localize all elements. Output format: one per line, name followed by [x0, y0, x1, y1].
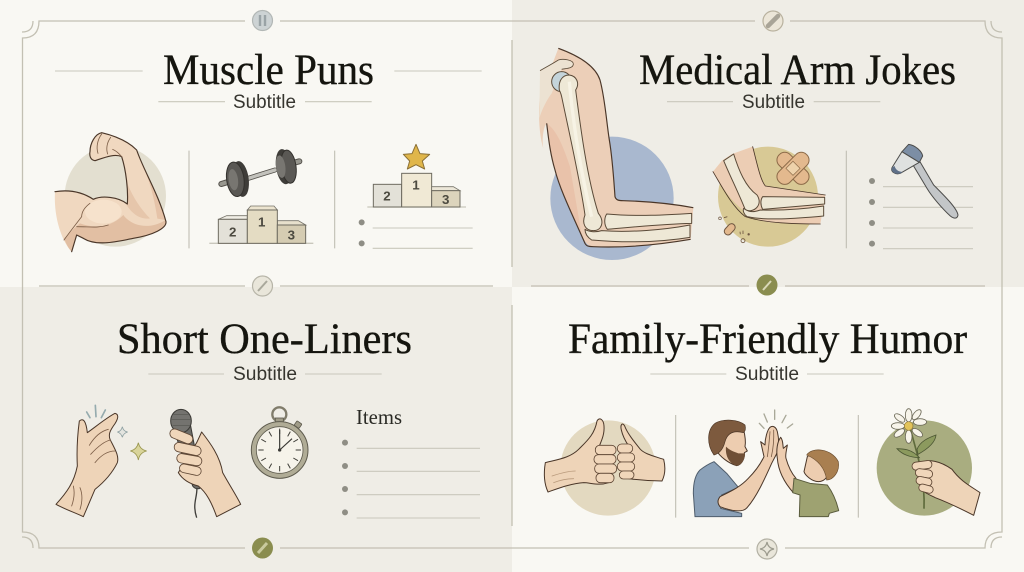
- icon: microphone in hand: [168, 409, 241, 518]
- icon: podium left: [209, 206, 313, 243]
- medallion: middle left: [252, 276, 272, 296]
- icon: flexed arm: [55, 133, 166, 252]
- title: muscle puns: Muscle Puns: [163, 47, 374, 94]
- icon: elbow with bandage: [713, 147, 825, 247]
- icon: podium right with star: 3: [442, 192, 449, 207]
- icon: podium left: 2: [229, 224, 236, 239]
- panel: short one-liners: [56, 316, 480, 518]
- panel artwork: muscle puns: [55, 71, 482, 252]
- panel: medical arm jokes: [539, 47, 973, 260]
- title: short one-liners: Short One-Liners: [117, 316, 412, 363]
- icon: arm anatomy: [539, 48, 693, 260]
- medallion: middle right: [756, 274, 778, 296]
- medallion: top left: [252, 10, 272, 30]
- medallion: bottom right: [757, 539, 777, 559]
- icon: podium left: 3: [288, 228, 295, 243]
- subtitle: medical arm jokes: Subtitle: [742, 92, 805, 113]
- icon: reflex hammer: [892, 144, 958, 218]
- icon: dad and child high five: [693, 410, 839, 517]
- items heading: Items: [356, 405, 402, 429]
- list: muscle puns: [359, 219, 473, 248]
- icon: podium right with star: 1: [412, 178, 420, 193]
- subtitle: family-friendly humor: Subtitle: [735, 364, 799, 385]
- subtitle: short one-liners: Subtitle: [233, 364, 297, 385]
- panel artwork: medical arm jokes: [539, 48, 973, 260]
- title: family-friendly humor: Family-Friendly Humor: [568, 316, 967, 363]
- icon: fist bump: [544, 419, 665, 516]
- panel artwork: family-friendly humor: [544, 374, 980, 518]
- icon: finger snap: [56, 405, 147, 517]
- list: medical arm jokes: [869, 178, 973, 249]
- icon: stopwatch: [251, 407, 308, 478]
- list: short one-liners: [342, 440, 480, 518]
- medallion: top right: [763, 11, 783, 31]
- icon: podium left: 1: [258, 215, 266, 230]
- icon: dumbbell: [221, 148, 299, 198]
- panel: family-friendly humor: [544, 316, 980, 518]
- icon: podium right with star: 2: [383, 188, 391, 203]
- panel: muscle puns: [55, 47, 482, 252]
- medallion: bottom left: [252, 538, 273, 558]
- panel artwork: short one-liners: [56, 374, 480, 518]
- icon: podium right with star: [367, 144, 466, 207]
- icon: hand offering daisy: [877, 408, 980, 516]
- title: medical arm jokes: Medical Arm Jokes: [639, 47, 956, 94]
- subtitle: muscle puns: Subtitle: [233, 92, 296, 113]
